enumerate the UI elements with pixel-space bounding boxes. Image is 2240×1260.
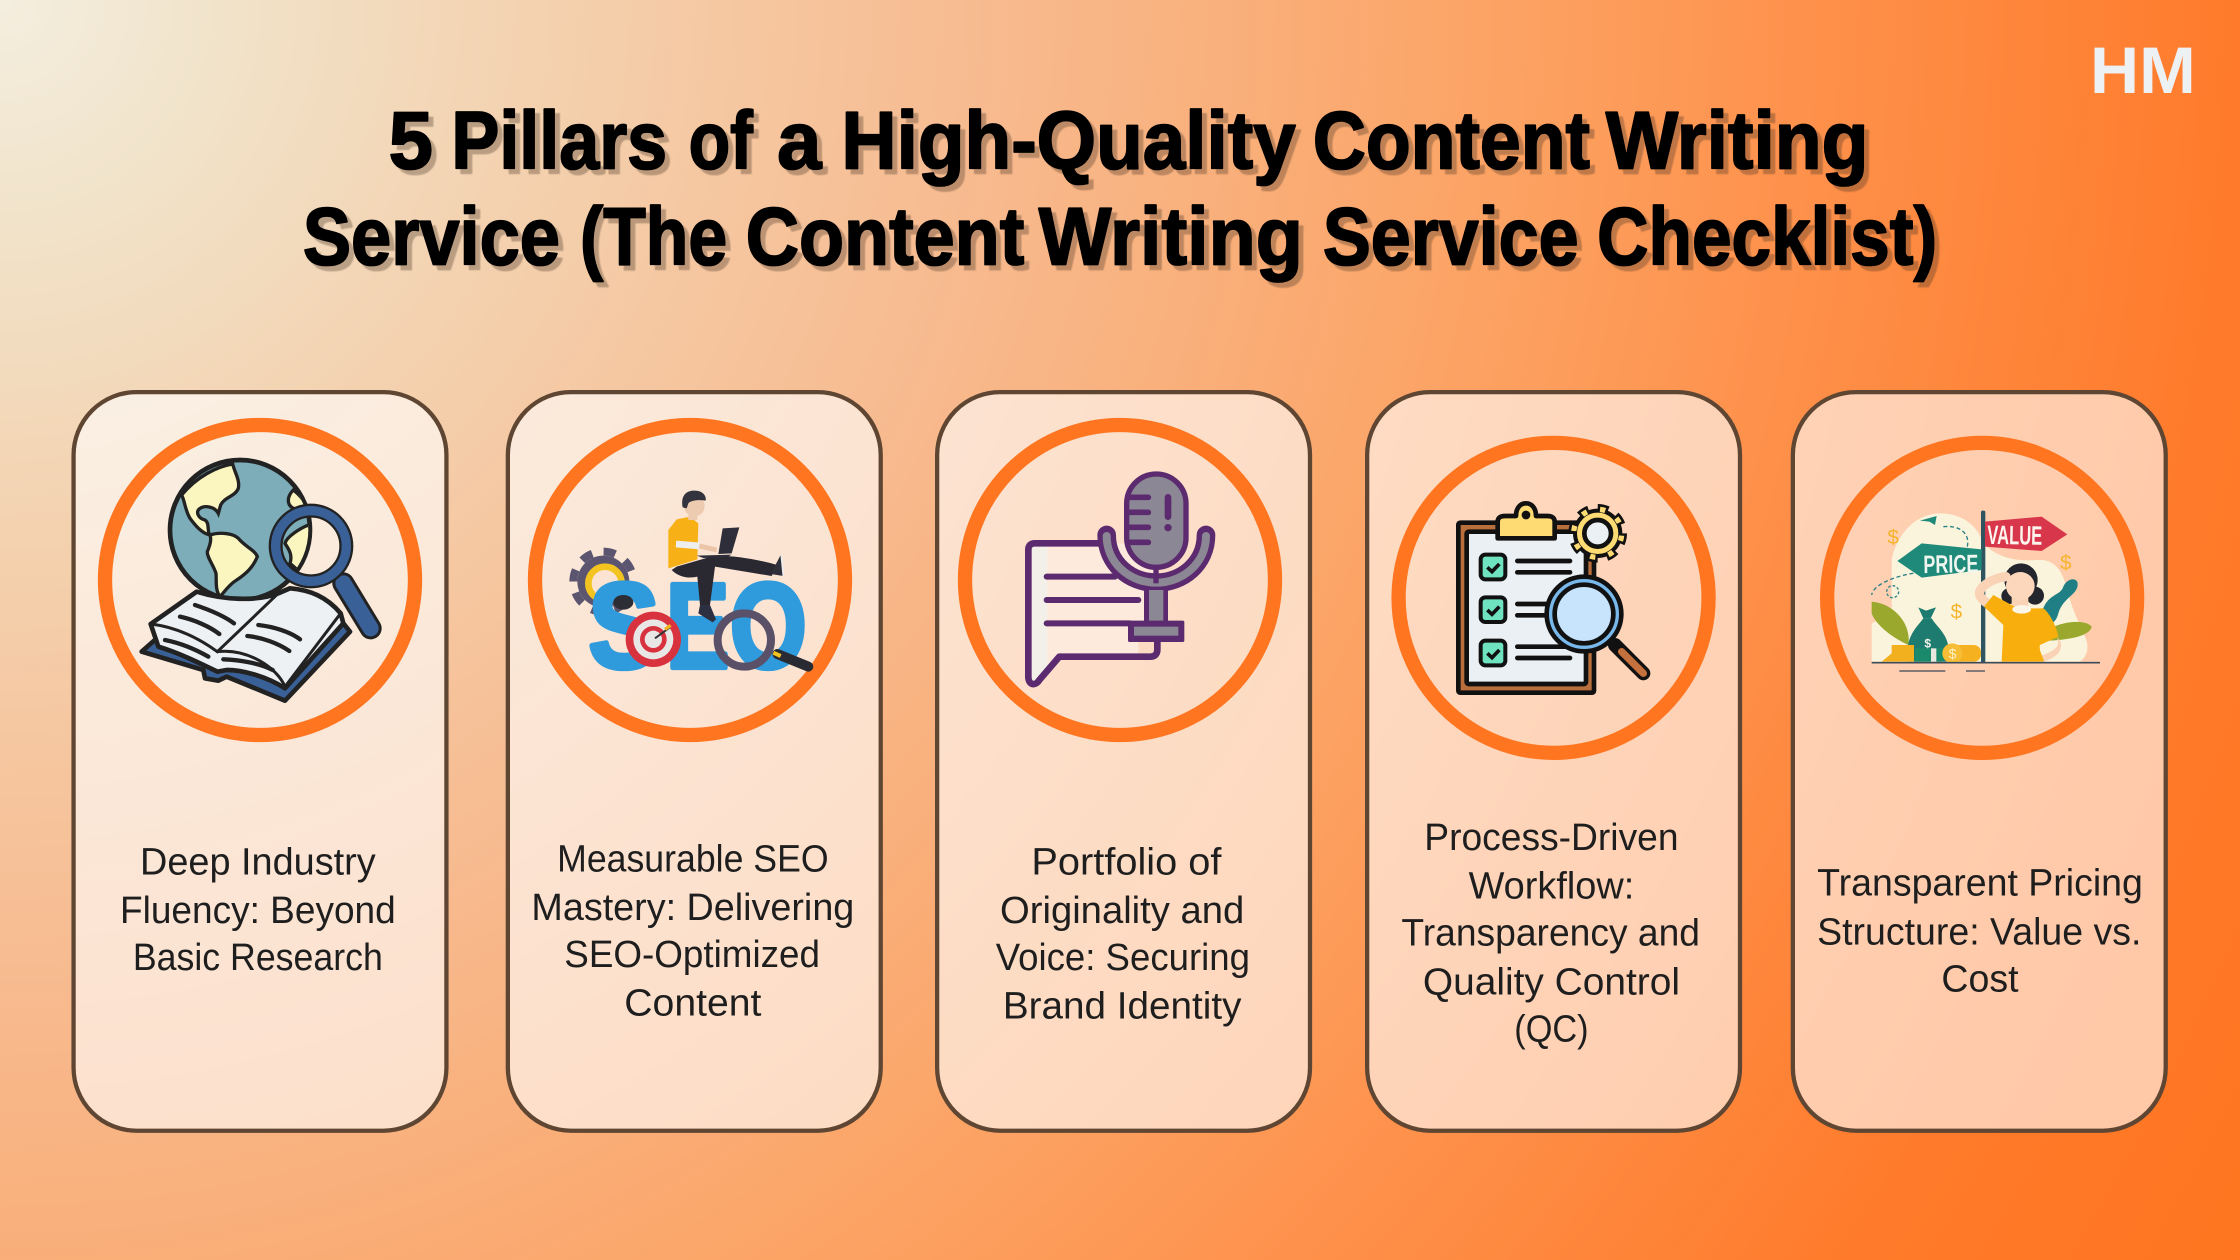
icon ring: [1827, 443, 2137, 753]
icon: price vs value signpost: [1872, 511, 2100, 671]
logo: HM: HM: [2090, 34, 2196, 107]
text: card 4: Quality Control: [1423, 961, 1680, 1003]
panel: Process-Driven Workflow: [1367, 392, 1740, 1131]
panel: Measurable SEO Mastery: [508, 392, 881, 1131]
panel: Portfolio of Originality: [937, 392, 1310, 1131]
text: card 4: Transparency and: [1401, 913, 1700, 955]
icon: SEO letters with person on laptop: E: [666, 558, 729, 693]
text: card 1: Basic Research: [133, 937, 383, 979]
text: card 2: Measurable SEO: [557, 838, 829, 880]
text: card 5: Transparent Pricing: [1817, 863, 2143, 905]
title: [303, 96, 1937, 282]
text: card 3: Voice: Securing: [996, 937, 1250, 979]
text: card 3: Originality and: [1000, 890, 1244, 932]
icon: globe, magnifier and open book: [142, 460, 371, 701]
icon ring: [105, 425, 415, 735]
title: (The: [580, 191, 727, 282]
text: card 4: Process-Driven: [1424, 817, 1679, 859]
title: Writing: [1039, 191, 1303, 282]
icon: price vs value signpost: $: [1924, 636, 1931, 650]
text: card 3: Portfolio of: [1031, 841, 1222, 883]
title: Content: [1313, 96, 1590, 187]
text: card 4: (QC): [1514, 1008, 1589, 1050]
icon ring: [1399, 443, 1709, 753]
icon: price vs value signpost: $: [2060, 551, 2072, 574]
text: card 5: Structure: Value vs.: [1817, 911, 2141, 953]
panel: Deep Industry Fluency: [74, 392, 446, 1131]
icon: speech bubble and microphone: [1028, 474, 1206, 685]
icon ring: [535, 425, 845, 735]
icon: price vs value signpost: $: [1887, 526, 1899, 549]
title: Writing: [1606, 96, 1869, 187]
text: card 3: [996, 841, 1250, 1028]
title: a: [777, 96, 822, 187]
text: card 4: Workflow:: [1469, 866, 1634, 908]
title: of: [689, 96, 754, 187]
text: card 4: [1401, 817, 1700, 1050]
icon: price vs value signpost: $: [1951, 601, 1963, 624]
text: card 5: [1817, 863, 2143, 1000]
icon: SEO letters with person on laptop: [573, 491, 808, 693]
icon: clipboard checklist with gear and magnifier: [1458, 503, 1643, 693]
text: card 2: [531, 838, 854, 1025]
text: card 5: Cost: [1941, 958, 2019, 1000]
title: Service: [303, 191, 560, 282]
icon: SEO letters with person on laptop: O: [730, 558, 807, 693]
icon: price vs value signpost: $: [1949, 646, 1957, 662]
title: Service: [1323, 191, 1579, 282]
text: card 2: Mastery: Delivering: [531, 887, 854, 929]
icon: price vs value signpost: PRICE: [1923, 550, 1979, 579]
title: Pillars: [451, 96, 667, 187]
panel: Transparent Pricing: [1793, 392, 2166, 1131]
icon: SEO letters with person on laptop: S: [589, 558, 659, 693]
text: card 2: Content: [624, 983, 762, 1025]
icon: price vs value signpost: VALUE: [1987, 520, 2043, 551]
text: card 1: Fluency: Beyond: [120, 890, 396, 932]
text: card 1: [120, 841, 396, 979]
title: 5: [389, 96, 433, 187]
title: Content: [746, 191, 1024, 282]
text: card 2: SEO-Optimized: [564, 934, 820, 976]
text: card 3: Brand Identity: [1003, 986, 1242, 1028]
title: High-Quality: [841, 96, 1296, 187]
text: card 1: Deep Industry: [140, 841, 376, 883]
title: Checklist): [1597, 191, 1937, 282]
icon ring: [965, 425, 1275, 735]
